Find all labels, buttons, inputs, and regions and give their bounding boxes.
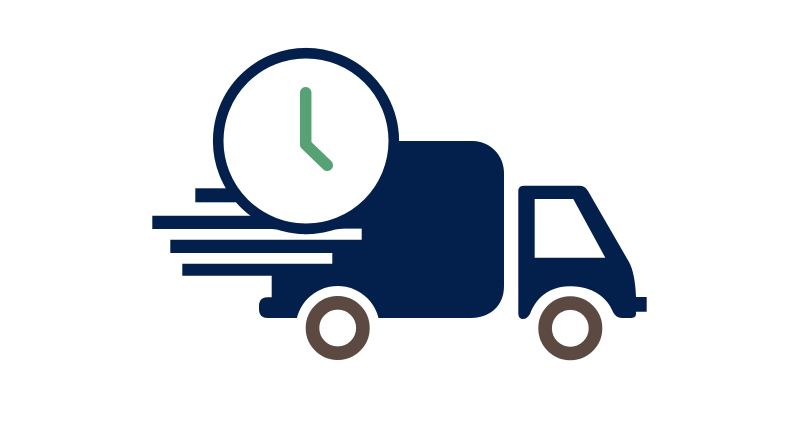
top speed line bbox=[195, 188, 245, 202]
clock hands bbox=[306, 93, 327, 165]
cab window bbox=[535, 199, 605, 258]
truck cargo body with speed lines bbox=[152, 141, 504, 318]
clock bbox=[218, 53, 394, 229]
truck cab bbox=[518, 186, 647, 319]
rear wheel bbox=[296, 286, 380, 353]
front wheel bbox=[545, 303, 596, 353]
clock face bbox=[218, 53, 394, 229]
